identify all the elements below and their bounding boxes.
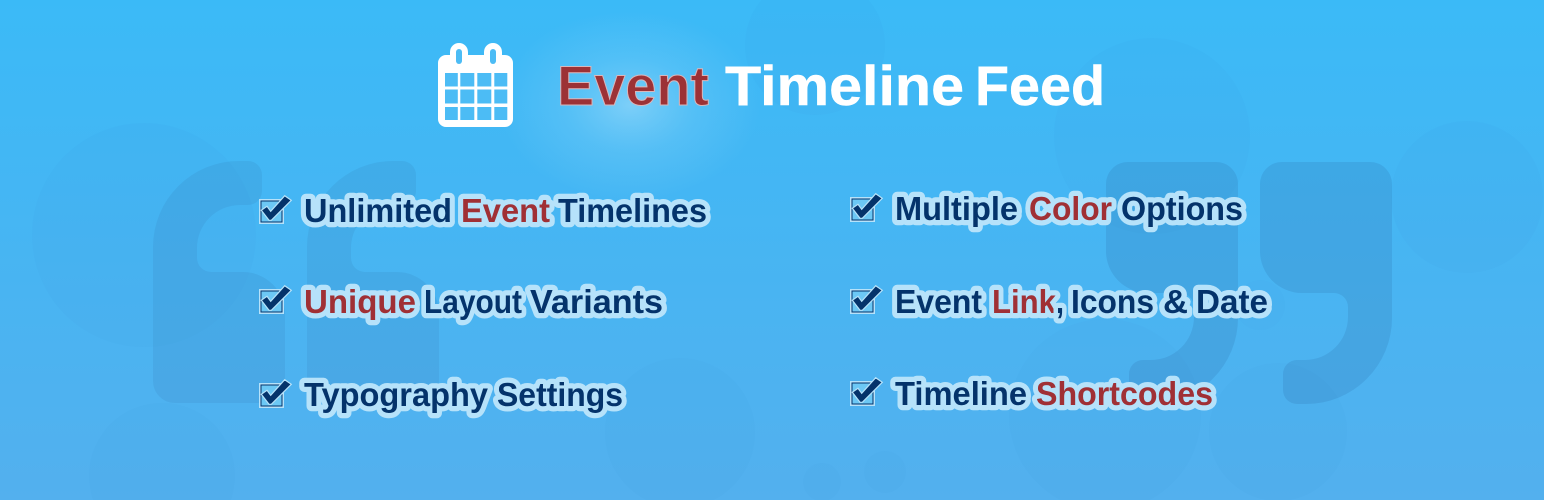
icon: checkbox [851,286,882,313]
feature text: Unique [304,284,416,321]
feature text: Color [1029,191,1112,228]
feature text [304,284,663,321]
feature text: Multiple [895,191,1018,228]
icon: checkbox [260,380,291,407]
feature text [895,376,1213,413]
feature text: Timeline [895,376,1027,413]
centre glow behind title [500,10,760,200]
icon: checkbox [851,194,882,221]
feature: Unique Layout Variants [260,284,663,321]
feature text [304,193,707,230]
feature text: Layout [424,284,522,321]
feature text: Options [1121,191,1243,228]
feature text: Settings [497,377,623,414]
title [557,54,1105,117]
feature text: Unlimited [304,193,452,230]
title: Event [557,54,709,117]
decorative opening quotation mark [153,161,439,403]
feature text: & [1163,284,1188,321]
feature text [895,284,1268,321]
icon: checkbox [851,378,882,405]
feature text: Icons [1071,284,1154,321]
feature text: Date [1196,284,1268,321]
feature: Typography Settings [260,377,623,414]
feature text: Event [895,284,982,321]
title: Feed [975,54,1105,117]
feature text [895,191,1243,228]
feature: Unlimited Event Timelines [260,193,707,230]
feature text: Shortcodes [1036,376,1213,413]
feature: Timeline Shortcodes [851,376,1213,413]
feature: Event Link, Icons & Date [851,284,1268,321]
feature text: Link [992,284,1056,321]
feature text: Event [461,193,550,230]
decorative closing quotation mark [1106,162,1392,404]
feature: Multiple Color Options [851,191,1243,228]
icon: checkbox [260,286,291,313]
feature text [304,377,623,414]
feature text: Variants [530,284,663,321]
feature text: , [1056,284,1064,321]
title: Timeline [725,54,964,117]
feature text: Typography [304,377,488,414]
icon: checkbox [260,196,291,223]
feature text: Timelines [558,193,707,230]
icon: calendar [438,43,513,127]
